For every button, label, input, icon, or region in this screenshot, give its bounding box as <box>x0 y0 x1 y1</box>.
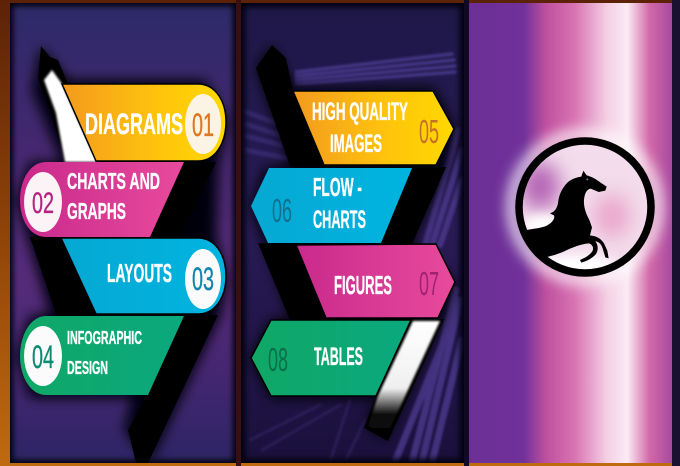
item 08: tables: TABLES <box>314 343 363 371</box>
item 05: high quality images: 05 <box>419 113 439 150</box>
logo: horse in ring <box>519 141 651 273</box>
item 04: infographic design <box>20 316 184 395</box>
panel: left services 01-04 <box>8 1 238 465</box>
logo interior shading <box>522 144 648 270</box>
item 05: high quality images <box>293 91 454 165</box>
item 06: flow charts: CHARTS <box>313 206 366 234</box>
item 07: figures: 07 <box>419 265 439 302</box>
panel: logo gradient <box>469 3 672 463</box>
background rays <box>246 54 462 462</box>
item 03: layouts: LAYOUTS <box>107 258 172 288</box>
item 01: diagrams: 01 <box>192 107 214 143</box>
black ribbons <box>256 45 446 441</box>
item 02: charts and graphs: GRAPHS <box>67 198 126 224</box>
item 08: tables: 08 <box>268 341 288 378</box>
item 03: layouts: 03 <box>192 261 214 297</box>
item 02: charts and graphs <box>20 162 184 237</box>
item 02: charts and graphs: CHARTS AND <box>67 168 160 194</box>
item 08: tables <box>251 320 411 396</box>
item 04: infographic design: 04 <box>32 339 54 375</box>
item 06: flow charts: 06 <box>272 192 292 229</box>
panel: middle services 05-08 <box>239 1 466 465</box>
item 06: flow charts: FLOW - <box>313 172 362 202</box>
white ribbon fold <box>44 70 97 162</box>
item 02: charts and graphs: 02 <box>32 187 54 220</box>
item 01: diagrams <box>62 84 226 161</box>
logo glow <box>513 135 657 279</box>
item 05: high quality images: IMAGES <box>330 130 382 158</box>
item 06: flow charts <box>251 168 412 243</box>
item 07: figures: FIGURES <box>334 270 392 300</box>
item 04: infographic design: INFOGRAPHIC <box>67 328 142 348</box>
item 05: high quality images: HIGH QUALITY <box>312 98 408 126</box>
item 01: diagrams: DIAGRAMS <box>85 108 183 141</box>
item 04: infographic design: DESIGN <box>67 358 108 378</box>
item 03: layouts <box>61 238 226 314</box>
item 07: figures <box>296 244 455 318</box>
black ribbons <box>30 46 218 463</box>
white ribbon fold <box>368 321 440 437</box>
